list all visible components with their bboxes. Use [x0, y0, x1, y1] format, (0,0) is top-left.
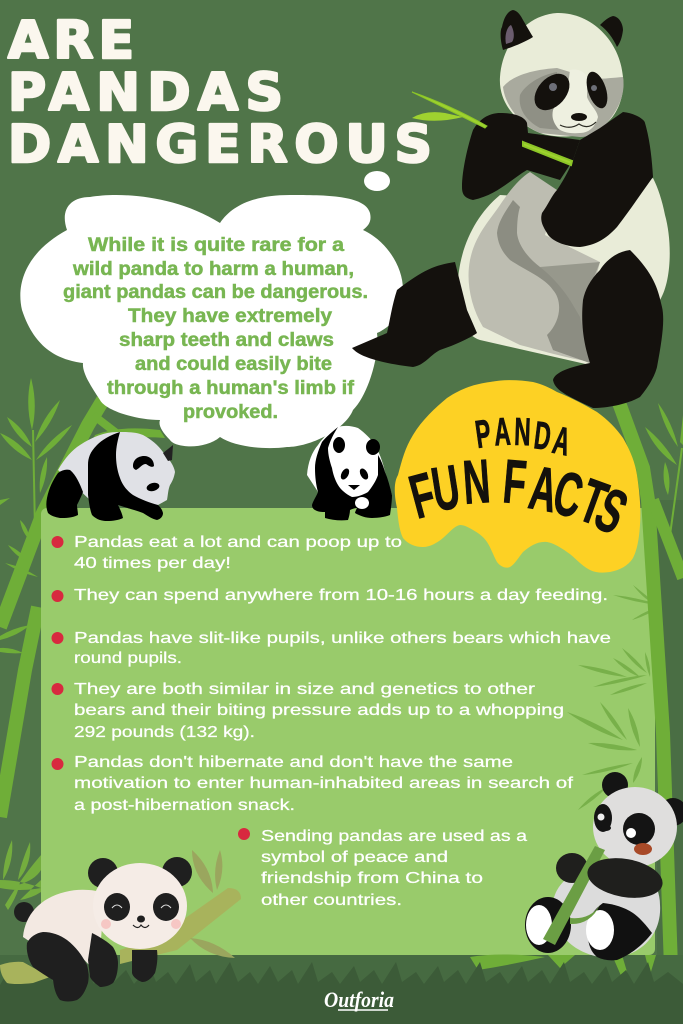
bubble text: [63, 235, 368, 423]
panda heading: A: [493, 409, 512, 454]
background bamboo left: [0, 378, 145, 910]
bamboo: [0, 850, 241, 984]
legs: [352, 250, 663, 408]
bullet 4: 292 pounds (132 kg).: [74, 724, 255, 741]
belly shading: [469, 172, 600, 363]
title: [8, 11, 432, 175]
fact list: [52, 534, 611, 909]
bubble text: provoked.: [183, 402, 278, 423]
bamboo sprig: [412, 92, 572, 165]
fun facts heading: S: [585, 474, 638, 547]
bullet 6: other countries.: [261, 892, 402, 909]
bullet 6: friendship from China to: [261, 870, 483, 887]
panel leaves right: [567, 585, 660, 810]
thought bubble: [20, 171, 403, 448]
bullet 5: [52, 754, 574, 814]
cute panda with bamboo bottom left: [0, 850, 241, 1002]
bullet 4: [52, 681, 564, 741]
bubble text: While it is quite rare for a: [88, 235, 344, 256]
panda heading: D: [532, 413, 553, 458]
bubble text: wild panda to harm a human,: [72, 259, 354, 280]
bullet 6: [238, 828, 527, 909]
fun facts heading: [403, 446, 638, 547]
panda hugging bamboo bottom right: [525, 772, 683, 960]
bullet 3: Pandas have slit-like pupils, unlike others bears which have: [74, 630, 611, 647]
bullet 3: [52, 630, 611, 667]
bullet 1: Pandas eat a lot and can poop up to: [74, 534, 402, 551]
bubble text: They have extremely: [128, 306, 332, 327]
head: [500, 13, 623, 137]
panda heading: N: [514, 409, 531, 454]
background bamboo behind small pandas: [90, 428, 165, 445]
bullet 4: bears and their biting pressure adds up to a whopping: [74, 702, 564, 719]
outforia logo: Outforia: [324, 987, 394, 1012]
face shading: [503, 68, 624, 137]
bubble text: through a human's limb if: [107, 378, 355, 399]
fun facts heading: U: [427, 452, 464, 524]
fact panel: [41, 508, 660, 955]
bullet 5: motivation to enter human-inhabited areas in search of: [74, 775, 574, 792]
bubble text: giant pandas can be dangerous.: [63, 282, 368, 303]
panda heading: P: [473, 411, 494, 457]
fun facts heading: N: [461, 446, 492, 517]
walking panda left: [46, 432, 175, 521]
title: DANGEROUS: [8, 115, 432, 175]
bullet 1: 40 times per day!: [74, 555, 231, 572]
panda heading: [473, 409, 574, 464]
bullet 6: symbol of peace and: [261, 849, 448, 866]
fun facts heading: T: [571, 466, 616, 538]
bullet 1: [52, 534, 402, 572]
foreground bamboo right: [618, 400, 683, 970]
yellow fun facts blob: [395, 380, 640, 573]
title: PANDAS: [8, 63, 283, 123]
fun facts heading: F: [403, 459, 442, 532]
front-facing panda: [307, 426, 392, 520]
panda heading: A: [549, 418, 574, 464]
bullet 3: round pupils.: [74, 650, 182, 667]
bullet 5: Pandas don't hibernate and don't have the same: [74, 754, 513, 771]
bullet 2: They can spend anywhere from 10-16 hours a day feeding.: [74, 587, 608, 604]
bullet 5: a post-hibernation snack.: [74, 797, 295, 814]
arms: [462, 112, 653, 247]
ears: [501, 10, 623, 50]
fun facts heading: A: [524, 453, 563, 525]
fun facts heading: F: [501, 446, 529, 517]
title: ARE: [8, 11, 134, 71]
fun facts heading: C: [547, 458, 590, 531]
eyes: [528, 67, 611, 127]
bullet 6: Sending pandas are used as a: [261, 828, 527, 845]
grass footer: [0, 954, 683, 1024]
bullet 4: They are both similar in size and genetics to other: [74, 681, 536, 698]
bubble text: sharp teeth and claws: [119, 330, 334, 351]
body: [458, 178, 670, 365]
big panda eating bamboo: [352, 10, 670, 408]
bubble text: and could easily bite: [135, 354, 332, 375]
